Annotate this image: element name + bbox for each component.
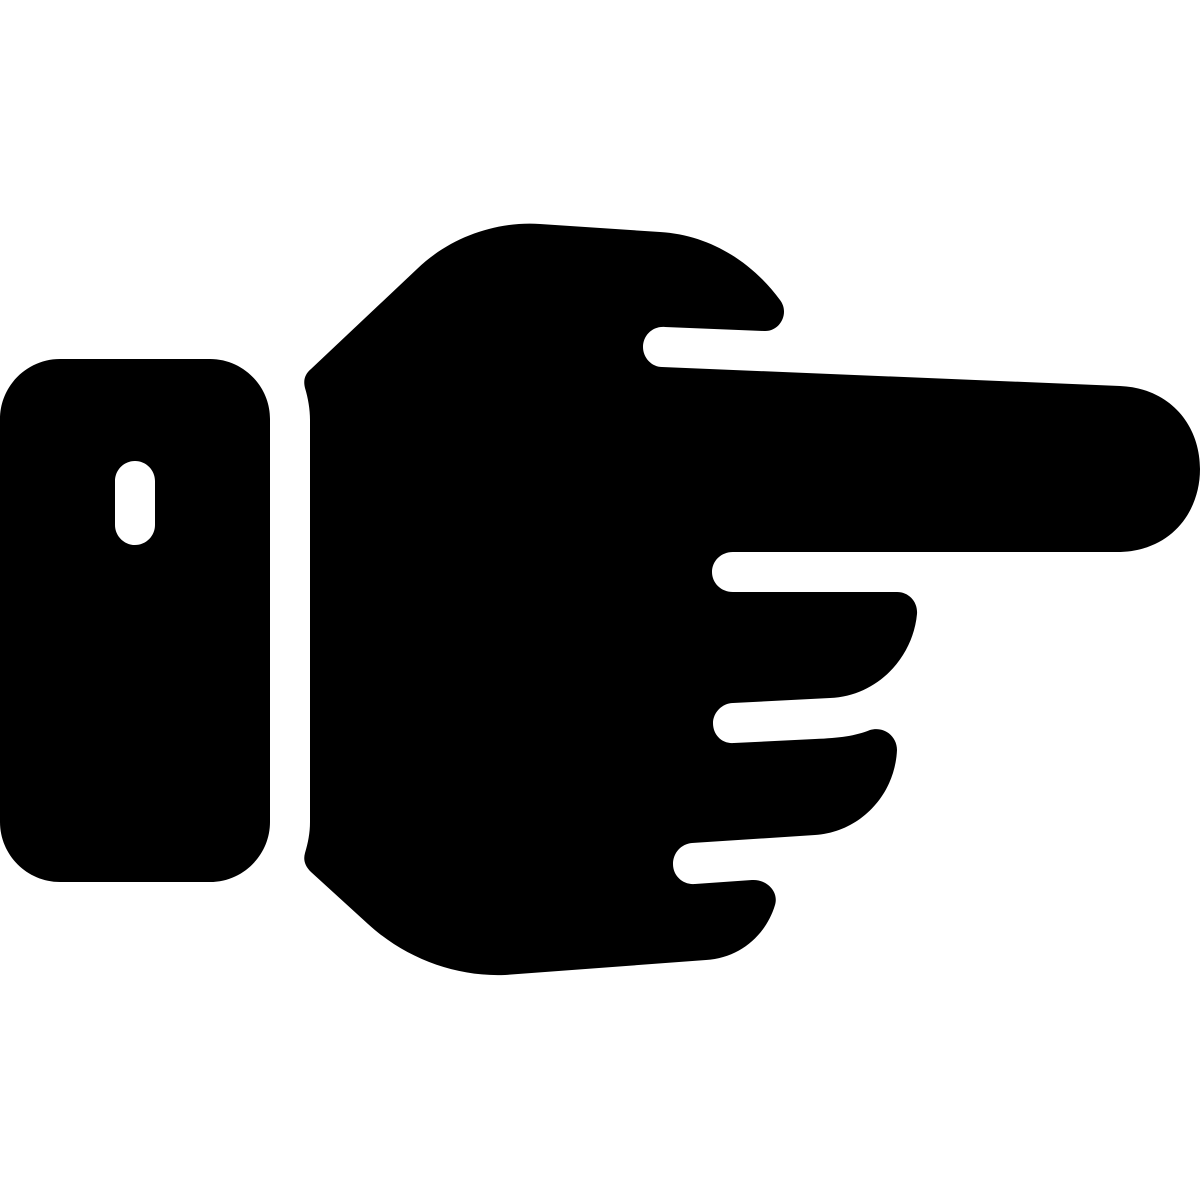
icon: shirt cuff with button slot <box>0 359 270 882</box>
icon: hand with extended index finger <box>304 224 1200 975</box>
